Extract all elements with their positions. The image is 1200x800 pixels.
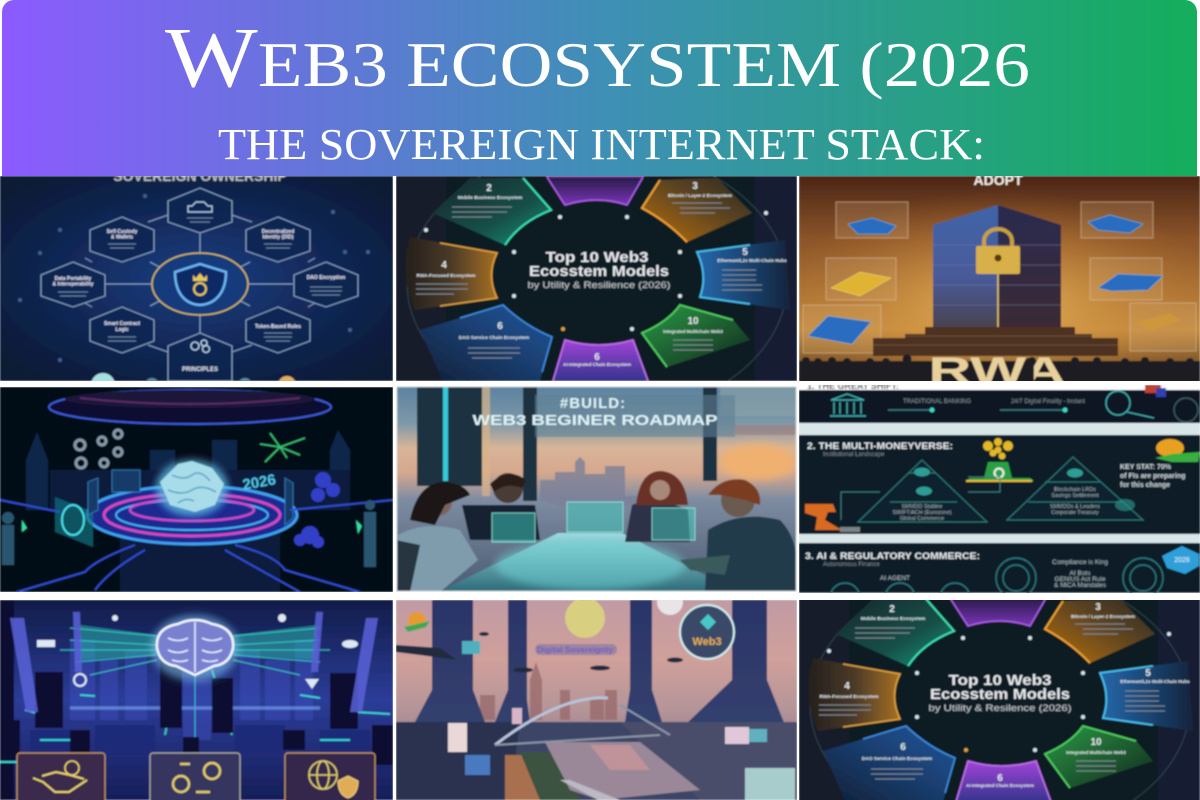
panel: top 10 web3 ecosystem wheel: 4 (441, 260, 447, 271)
bar: multi-moneyverse: Institutional Landscape (823, 452, 885, 458)
panel: top 10 web3 ecosystem wheel repeat: 10 (1090, 737, 1102, 748)
panel: build roadmap photo (396, 386, 797, 592)
faint city (26, 430, 350, 510)
panel: top 10 web3 ecosystem wheel: 10 (687, 316, 699, 327)
icons: gold bars (831, 272, 891, 296)
building (933, 205, 998, 327)
bar: the great shift: TRADITIONAL BANKING (903, 399, 971, 405)
panel: top 10 web3 ecosystem wheel: AI-Integrated Chain Ecosystem (563, 362, 631, 367)
bridge (495, 698, 608, 745)
icon: coin tree (966, 438, 1034, 481)
panel: top 10 web3 ecosystem wheel: Integrated Multichain Web3 (663, 329, 723, 334)
panel: top 10 web3 ecosystem wheel repeat: 4 (844, 681, 850, 692)
panel: top 10 web3 ecosystem wheel repeat (799, 569, 1200, 800)
panel: sovereign ownership hexagon diagram: Decentralized (262, 229, 294, 235)
panel: sovereign ownership hexagon diagram: Identity (DID) (262, 234, 294, 240)
side frames (803, 202, 1196, 353)
icon: blue hexagon badge: 2026 (1174, 557, 1190, 564)
bar: AI and regulatory commerce: Autonomous Finance (823, 562, 880, 568)
panel: top 10 web3 ecosystem wheel repeat: Mobile Business Ecosystem (861, 616, 925, 622)
pyramids (858, 457, 1143, 522)
distant buildings (480, 662, 617, 720)
bar: AI and regulatory commerce: AI Bots (1070, 570, 1091, 577)
key stat: for this change (1120, 482, 1170, 489)
segment 2: teal (836, 599, 954, 666)
bar: multi-moneyverse (799, 435, 1200, 534)
panel: sovereign ownership hexagon diagram (0, 176, 393, 381)
segment 5: blue (697, 240, 790, 310)
bar: multi-moneyverse: Global Commerce (900, 516, 944, 522)
airships (396, 632, 683, 672)
segment 5: blue (1100, 661, 1193, 731)
city blocks (70, 640, 313, 740)
panel: sovereign ownership hexagon diagram: & Wallets (111, 234, 133, 240)
key stat: KEY STAT: 70% (1120, 464, 1172, 471)
panel: top 10 web3 ecosystem wheel repeat: 6 (900, 742, 906, 753)
icon: orange coins (1155, 439, 1200, 462)
panel: hologram brain platform: 2026 (241, 471, 277, 494)
key stat: of FIs are preparing (1120, 473, 1185, 480)
segment 6: blue (823, 726, 955, 800)
panel: top 10 web3 ecosystem wheel repeat: 6 (997, 773, 1003, 784)
bar: multi-moneyverse: Corporate Treasury (1051, 510, 1099, 516)
panel: top 10 web3 ecosystem wheel repeat: 2 (889, 604, 895, 615)
towers (0, 658, 393, 765)
panel: AI brain over city (0, 600, 393, 800)
segment: top purple (950, 598, 1046, 626)
panel: sovereign ownership hexagon diagram: Data Portability (55, 276, 92, 282)
panel: digital city sunset (396, 589, 797, 800)
upper disc (49, 390, 331, 424)
panel: top 10 web3 ecosystem wheel: Mobile Business Ecosystem (458, 195, 522, 201)
people (396, 471, 797, 592)
bar: AI and regulatory commerce: AI AGENT (880, 575, 910, 582)
panel: hologram brain platform (0, 387, 393, 592)
panel: top 10 web3 ecosystem wheel repeat: AI-Integrated Chain Ecosystem (966, 783, 1034, 788)
segment: bottom purple (956, 761, 1051, 800)
feature box: gears (150, 753, 240, 800)
bar: multi-moneyverse: SMMDDs & Leaders (1050, 504, 1100, 510)
panel: sovereign ownership hexagon diagram: Logic (115, 327, 129, 333)
icon: central shield (152, 253, 248, 315)
heading: wheel title repeat: by Utility & Resilence (2026) (928, 703, 1072, 714)
holographic screens (492, 502, 695, 542)
icon: green neuron (260, 433, 305, 462)
icon: cloud (188, 202, 212, 212)
panel: top 10 web3 ecosystem wheel: Bitcoin / Layer-2 Ecosystem (668, 193, 732, 199)
heading: wheel title: Top 10 Web3 (546, 249, 648, 266)
bar: AI and regulatory commerce: 3. AI & REGULATORY COMMERCE: (805, 551, 980, 562)
segment: top purple (547, 177, 643, 205)
heading: roadmap (471, 397, 718, 426)
teal data bands (80, 625, 317, 660)
panel: RWA tower: ADOPT (974, 172, 1023, 188)
panel: top 10 web3 ecosystem wheel repeat: Bitcoin / Layer-2 Ecosystem (1071, 614, 1135, 620)
heading: wheel title: Ecosstem Models (529, 263, 669, 280)
distant city (540, 457, 640, 506)
segment 4: brown (808, 658, 900, 731)
badge: web3 (680, 605, 734, 659)
badge: web3: Web3 (692, 636, 722, 648)
icon: blue hexagon badge (1162, 546, 1199, 574)
panel: top 10 web3 ecosystem wheel repeat: Integrated Multichain Web3 (1066, 750, 1126, 755)
panel: top 10 web3 ecosystem wheel: 6 (594, 352, 600, 363)
panel: sovereign ownership hexagon diagram: SOVEREIGN OWNERSHIP (113, 168, 287, 184)
panel: top 10 web3 ecosystem wheel: 5 (742, 247, 748, 258)
bar: multi-moneyverse: Savings Settlement (1051, 493, 1099, 499)
sun (565, 598, 605, 638)
panel: top 10 web3 ecosystem wheel repeat: DAO Service Chain Ecosystem (862, 756, 932, 762)
icon: gears (191, 340, 210, 352)
panel: top 10 web3 ecosystem wheel repeat: RWA-Focused Ecosystem (819, 694, 879, 700)
panel: RWA tower: RWA (928, 350, 1066, 391)
title band (535, 395, 735, 437)
window pillars (417, 386, 717, 501)
segment: bottom purple (553, 340, 648, 381)
segment 2: teal (433, 178, 551, 245)
segment 10: green (642, 305, 750, 367)
bar: the great shift: 1. THE GREAT SHIFT: (807, 381, 899, 391)
panel: top 10 web3 ecosystem wheel: 3 (692, 181, 698, 192)
bar: AI and regulatory commerce (799, 543, 1200, 613)
towers (415, 600, 785, 725)
brain (151, 615, 239, 681)
subtitle: THE SOVEREIGN INTERNET STACK: (218, 120, 985, 169)
lower city (396, 722, 797, 800)
panel: sovereign ownership hexagon diagram: & Interoperability (52, 282, 94, 288)
panel: top 10 web3 ecosystem wheel: RWA-Focused Ecosystem (416, 273, 476, 279)
heading: wheel title (528, 249, 670, 291)
segment 6: blue (420, 305, 552, 381)
panel: top 10 web3 ecosystem wheel: 2 (486, 183, 492, 194)
label pill: Digital Sovereignty (537, 646, 614, 654)
key stat (1120, 464, 1185, 489)
floating cards (448, 641, 795, 800)
heading: wheel title repeat (928, 672, 1072, 714)
blue blobs (294, 472, 340, 548)
panel: sovereign ownership hexagon diagram: DAO Encryption (307, 275, 345, 281)
heading: wheel title repeat: Top 10 Web3 (948, 672, 1052, 689)
header banner (2, 0, 1197, 176)
segment 3: orange (642, 178, 752, 242)
panel: sovereign ownership hexagon diagram: Self-Custody (107, 229, 138, 235)
heading: roadmap: #BUILD: (560, 395, 626, 412)
panel: multi-moneyverse infographic (799, 381, 1200, 613)
bar: the great shift: 24/7 Digital Finality - Instant (1011, 399, 1085, 405)
heading: roadmap: WEB3 BEGINER ROADMAP (472, 412, 718, 429)
figures (2, 500, 376, 567)
bar: multi-moneyverse: 2. THE MULTI-MONEYVERSE: (807, 441, 953, 452)
panel: top 10 web3 ecosystem wheel: DAO Service Chain Ecosystem (459, 335, 529, 341)
rings (87, 486, 297, 544)
title: WEB3 ECOSYSTEM (2026 (165, 9, 1030, 105)
bar: multi-moneyverse: Blockchain LRDs (1054, 487, 1096, 493)
panel: sovereign ownership hexagon diagram: PRINCIPLES (182, 367, 218, 373)
segment 10: green (1045, 726, 1153, 788)
segment 4: brown (405, 237, 497, 310)
crowd (799, 354, 1200, 383)
panel: top 10 web3 ecosystem wheel: Ethereum/L2s Multi-Chain Hubs (717, 258, 787, 263)
sunset glow (720, 444, 796, 480)
circuit wires (0, 500, 393, 592)
panel: top 10 web3 ecosystem wheel repeat: 5 (1145, 668, 1151, 679)
bar: multi-moneyverse: SMMDD Stablee (902, 504, 942, 510)
panel: top 10 web3 ecosystem wheel: 6 (497, 321, 503, 332)
icons: blue tiles (808, 215, 1163, 344)
feature box: globe and shield (285, 753, 375, 800)
panel: top 10 web3 ecosystem wheel repeat: 3 (1095, 602, 1101, 613)
glass panels (55, 470, 293, 547)
table (443, 532, 706, 590)
panel: sovereign ownership hexagon diagram: Token-Based Rules (255, 324, 301, 330)
segment 3: orange (1045, 599, 1155, 663)
bar: multi-moneyverse: SWIFT/ACH (Eurozone) (893, 510, 952, 516)
bar: the great shift (799, 381, 1200, 423)
river (545, 742, 700, 800)
bar: AI and regulatory commerce: GENIUS Act Rule (1055, 576, 1106, 583)
icon: orange hand (805, 504, 860, 532)
panel: top 10 web3 ecosystem wheel repeat: Ethereum/L2s Multi-Chain Hubs (1120, 679, 1190, 684)
heading: wheel title repeat: Ecosstem Models (930, 686, 1070, 703)
icon: padlock (976, 229, 1020, 274)
brain hologram (156, 460, 228, 516)
steps (873, 327, 1118, 356)
green and orange strips (505, 755, 540, 800)
panel: top 10 web3 ecosystem wheel (396, 176, 797, 381)
heading: wheel title: by Utility & Resilience (2026) (528, 280, 670, 291)
bar: AI and regulatory commerce: Compliance is King (1052, 559, 1108, 566)
icon clusters (75, 430, 122, 468)
bar: AI and regulatory commerce: & MiCA Mandates (1054, 582, 1107, 589)
icon: coin (404, 612, 430, 632)
panel: sovereign ownership hexagon diagram: Smart Contract (104, 321, 140, 327)
panel: RWA tower (799, 172, 1200, 391)
feature box: handshake (17, 753, 105, 800)
light beams (10, 612, 378, 712)
